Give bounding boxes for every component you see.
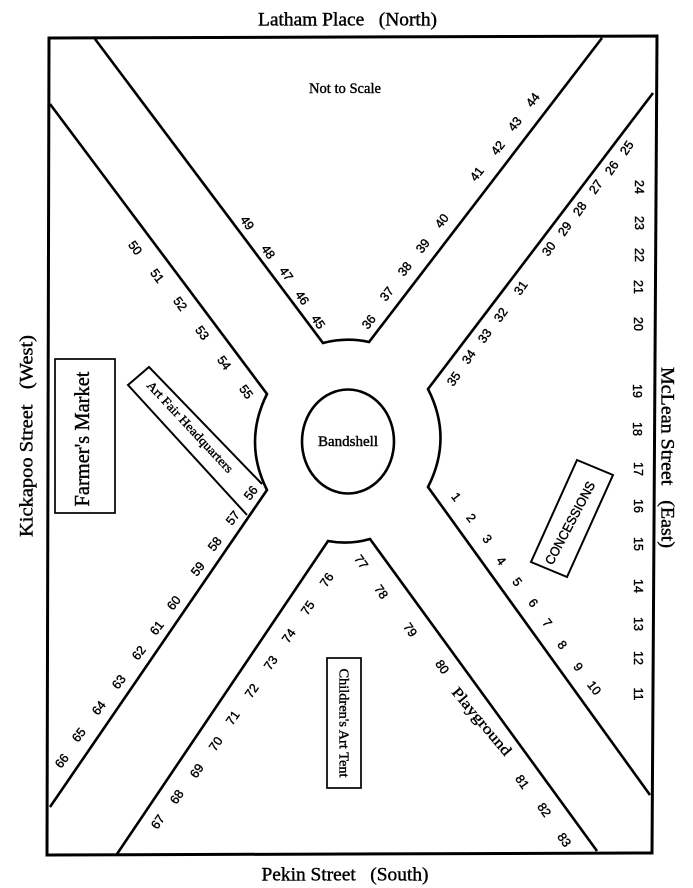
booths 77-83: 81 — [512, 772, 532, 792]
booths 67-76: 70 — [206, 734, 226, 754]
children's art tent box — [327, 658, 361, 788]
booths 11-24: 21 — [631, 280, 645, 294]
booths 77-83: 79 — [400, 620, 420, 640]
booths 67-76: 76 — [317, 570, 337, 590]
booths 1-10: 10 — [584, 678, 604, 698]
booths 11-24: 11 — [631, 688, 645, 701]
booths 1-10: 9 — [570, 660, 586, 674]
road edges and central circle — [50, 38, 653, 854]
booths 11-24: 18 — [630, 422, 644, 436]
booths 56-66: 62 — [129, 643, 149, 663]
booths 11-24 — [630, 180, 646, 701]
booths 56-66: 60 — [164, 593, 184, 613]
booths 25-35: 32 — [491, 305, 511, 325]
booths 56-66: 59 — [188, 559, 208, 579]
booths 25-35: 34 — [459, 347, 479, 367]
booths 67-76: 75 — [298, 598, 318, 618]
booths 36-44: 44 — [523, 90, 543, 110]
booths 56-66 — [52, 483, 261, 771]
booths 36-44: 39 — [413, 236, 433, 256]
booths 36-44: 43 — [505, 114, 525, 134]
booths 67-76 — [148, 570, 337, 832]
booths 11-24: 14 — [631, 579, 645, 593]
booths 36-44 — [359, 90, 543, 332]
booths 25-35: 30 — [539, 239, 559, 259]
booths 25-35: 35 — [444, 369, 464, 389]
booths 25-35: 27 — [586, 177, 606, 197]
booths 25-35: 31 — [511, 278, 531, 298]
booths 1-10: 1 — [448, 490, 464, 504]
booths 1-10: 7 — [539, 616, 555, 630]
booths 50-55: 51 — [147, 266, 167, 286]
booths 11-24: 23 — [632, 216, 646, 230]
booths 36-44: 36 — [359, 312, 379, 332]
children's art tent box: Children's Art Tent — [336, 668, 352, 778]
booths 56-66: 61 — [147, 618, 167, 638]
booths 25-35 — [444, 138, 637, 389]
booths 56-66: 58 — [205, 534, 225, 554]
booths 1-10: 8 — [554, 638, 570, 652]
booths 56-66: 65 — [69, 725, 89, 745]
booths 67-76: 71 — [223, 708, 243, 728]
booths 11-24: 16 — [631, 499, 645, 513]
booths 11-24: 13 — [631, 617, 645, 631]
farmer's market box: Farmer's Market — [70, 371, 94, 506]
bandshell: Bandshell — [318, 434, 378, 450]
booths 11-24: 17 — [631, 462, 645, 476]
booths 67-76: 72 — [242, 681, 262, 701]
booths 36-44: 40 — [432, 211, 452, 231]
booths 25-35: 25 — [617, 138, 637, 158]
concessions box — [531, 460, 613, 577]
art fair headquarters box — [128, 367, 262, 515]
booths 1-10: 5 — [509, 575, 525, 589]
concessions box: CONCESSIONS — [542, 479, 598, 567]
booths 11-24: 15 — [631, 537, 645, 551]
booths 1-10: 4 — [493, 554, 509, 568]
booths 77-83 — [351, 552, 574, 850]
heading: west street: Kickapoo Street (West) — [16, 335, 38, 537]
booths 1-10: 3 — [479, 532, 495, 546]
booths 36-44: 42 — [488, 138, 508, 158]
booths 67-76: 69 — [187, 761, 207, 781]
booths 77-83: 77 — [351, 552, 371, 572]
booths 11-24: 20 — [631, 317, 645, 331]
booths 50-55: 54 — [214, 353, 234, 373]
booths 36-44: 37 — [377, 284, 397, 304]
booths 45-49: 49 — [237, 213, 257, 233]
booths 56-66: 63 — [109, 672, 129, 692]
booths 50-55: 50 — [125, 238, 145, 258]
booths 25-35: 26 — [602, 158, 622, 178]
booths 36-44: 41 — [467, 164, 487, 184]
note: scale: Not to Scale — [309, 81, 381, 97]
booths 56-66: 56 — [241, 483, 261, 503]
booths 1-10 — [448, 490, 604, 698]
booths 56-66: 57 — [223, 508, 243, 528]
booths 36-44: 38 — [395, 259, 415, 279]
booths 77-83: 82 — [534, 800, 554, 820]
booths 45-49: 46 — [292, 288, 312, 308]
heading: east street: McLean Street (East) — [656, 367, 678, 548]
playground label: Playground — [448, 685, 515, 760]
farmer's market box — [55, 359, 115, 513]
booths 77-83: 78 — [371, 582, 391, 602]
booths 45-49 — [237, 213, 328, 332]
booths 50-55: 55 — [236, 382, 256, 402]
booths 50-55: 52 — [170, 294, 190, 314]
booths 11-24: 19 — [630, 384, 644, 398]
booths 1-10: 2 — [463, 511, 479, 525]
booths 45-49: 48 — [258, 242, 278, 262]
booths 56-66: 66 — [52, 751, 72, 771]
booths 67-76: 68 — [167, 787, 187, 807]
booths 50-55: 53 — [192, 323, 212, 343]
booths 25-35: 33 — [475, 326, 495, 346]
booths 67-76: 73 — [261, 653, 281, 673]
booths 77-83: 80 — [432, 657, 452, 677]
art fair headquarters box: Art Fair Headquarters — [144, 378, 236, 476]
booths 25-35: 28 — [570, 199, 590, 219]
booths 11-24: 12 — [631, 651, 645, 665]
booths 56-66: 64 — [89, 698, 109, 718]
booths 25-35: 29 — [555, 219, 575, 239]
booths 67-76: 74 — [279, 626, 299, 646]
booths 1-10: 6 — [525, 596, 541, 610]
heading: south street: Pekin Street (South) — [262, 864, 428, 886]
heading: north street: Latham Place (North) — [258, 10, 437, 30]
booths 67-76: 67 — [148, 812, 168, 832]
booths 45-49: 47 — [276, 264, 296, 284]
bandshell — [302, 390, 394, 494]
booths 45-49: 45 — [308, 312, 328, 332]
booths 77-83: 83 — [554, 830, 574, 850]
booths 11-24: 22 — [632, 248, 646, 262]
booths 11-24: 24 — [632, 180, 646, 194]
booths 50-55 — [125, 238, 256, 402]
